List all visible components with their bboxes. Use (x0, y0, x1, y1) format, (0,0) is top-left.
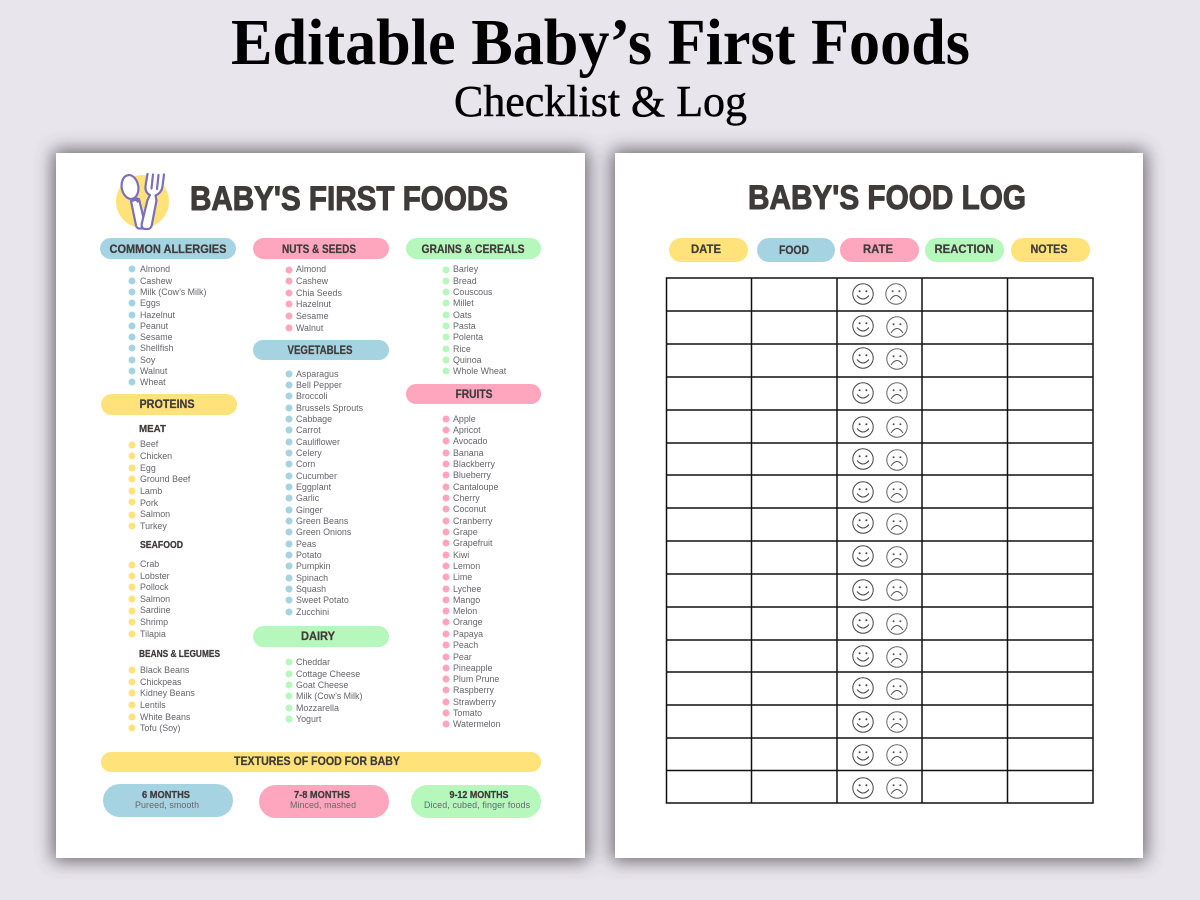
list: fruits: Kiwi (453, 550, 469, 560)
list: fruits: Pear (453, 652, 472, 662)
list: dairy: Mozzarella (296, 703, 339, 713)
pill: date: DATE (691, 242, 721, 256)
list: vegetables: Green Beans (296, 516, 349, 526)
list: common allergies: Wheat (140, 377, 166, 387)
list: grains and cereals: Rice (453, 344, 471, 354)
list: grains and cereals (446, 264, 507, 376)
banner: textures of food for baby (101, 752, 541, 772)
card: 9-12 months: 9-12 MONTHS (450, 789, 508, 801)
list: grains and cereals: Couscous (453, 287, 493, 297)
section: nuts and seeds (253, 238, 389, 333)
list: meat: Lamb (140, 486, 162, 496)
list: fruits: Blackberry (453, 459, 495, 469)
list: dairy: Cheddar (296, 657, 330, 667)
pill: fruits (406, 384, 541, 404)
list: meat: Chicken (140, 451, 172, 461)
card: 7-8 months: 7-8 MONTHS (294, 789, 350, 801)
pill: proteins: PROTEINS (140, 397, 194, 411)
list: vegetables: Celery (296, 448, 322, 458)
list: dairy: Goat Cheese (296, 680, 348, 690)
list: vegetables: Corn (296, 459, 315, 469)
list: fruits: Banana (453, 448, 484, 458)
list: dairy: Yogurt (296, 714, 322, 724)
card: 6 months: 6 MONTHS (142, 789, 190, 801)
list: meat: Turkey (140, 521, 167, 531)
pill: rate: RATE (863, 242, 893, 256)
list: fruits: Apricot (453, 425, 481, 435)
list: dairy: Milk (Cow’s Milk) (296, 691, 362, 701)
pill: notes (1011, 238, 1090, 262)
pill: common allergies: COMMON ALLERGIES (110, 242, 226, 256)
list: fruits: Lime (453, 572, 472, 582)
list: seafood: Sardine (140, 605, 171, 615)
list: grains and cereals: Pasta (453, 321, 476, 331)
list: fruits: Apple (453, 414, 476, 424)
list: fruits: Plum Prune (453, 674, 499, 684)
list: fruits: Mango (453, 595, 480, 605)
heading: baby's first foods: BABY'S FIRST FOODS (190, 180, 508, 218)
list: vegetables: Sweet Potato (296, 595, 349, 605)
card: 7-8 months (259, 785, 389, 818)
section: proteins (101, 394, 237, 733)
list: vegetables: Carrot (296, 425, 321, 435)
list: common allergies: Shellfish (140, 343, 174, 353)
list: fruits: Coconut (453, 504, 487, 514)
list: fruits: Lychee (453, 584, 481, 594)
list: nuts and seeds: Almond (296, 264, 326, 274)
list: beans and legumes: Chickpeas (140, 677, 182, 687)
list: common allergies: Sesame (140, 332, 173, 342)
list: vegetables: Cabbage (296, 414, 332, 424)
list: vegetables: Cucumber (296, 471, 337, 481)
list: fruits: Raspberry (453, 685, 495, 695)
section: dairy (253, 626, 389, 724)
list: grains and cereals: Polenta (453, 332, 483, 342)
title: Editable Baby’s First Foods (231, 6, 970, 79)
pill: fruits: FRUITS (456, 387, 492, 401)
card: 7-8 months: Minced, mashed (290, 800, 356, 810)
list: vegetables: Zucchini (296, 607, 329, 617)
pill: grains and cereals: GRAINS & CEREALS (422, 242, 524, 256)
heading: baby's food log: BABY'S FOOD LOG (748, 179, 1026, 217)
list: meat: Beef (140, 439, 159, 449)
list: fruits: Orange (453, 617, 483, 627)
list: vegetables: Green Onions (296, 527, 352, 537)
list: vegetables: Bell Pepper (296, 380, 342, 390)
pill: date (669, 238, 748, 262)
pill: food: FOOD (779, 243, 809, 257)
list: fruits: Grape (453, 527, 478, 537)
list: beans and legumes: White Beans (140, 712, 191, 722)
list: fruits: Lemon (453, 561, 480, 571)
table grid (666, 278, 1093, 803)
card: 9-12 months (411, 785, 541, 818)
list: fruits: Watermelon (453, 719, 501, 729)
list: seafood (132, 559, 171, 639)
list: vegetables: Asparagus (296, 369, 339, 379)
card: 6 months (103, 784, 233, 817)
list: fruits: Papaya (453, 629, 483, 639)
list: fruits: Peach (453, 640, 478, 650)
subheading: seafood: SEAFOOD (140, 540, 183, 551)
list: nuts and seeds: Cashew (296, 276, 329, 286)
section: fruits (406, 384, 541, 729)
list: nuts and seeds: Hazelnut (296, 299, 332, 309)
icon: spoon and fork (116, 174, 169, 229)
list: meat: Ground Beef (140, 474, 191, 484)
list: vegetables: Squash (296, 584, 326, 594)
pill: nuts and seeds: NUTS & SEEDS (282, 242, 356, 256)
list: vegetables: Broccoli (296, 391, 328, 401)
list: nuts and seeds: Sesame (296, 311, 329, 321)
list: common allergies: Milk (Cow’s Milk) (140, 287, 206, 297)
pill: notes: NOTES (1030, 242, 1068, 256)
list: grains and cereals: Barley (453, 264, 479, 274)
pill: rate (840, 238, 919, 262)
card: 9-12 months: Diced, cubed, finger foods (424, 800, 531, 810)
list: common allergies: Eggs (140, 298, 161, 308)
pill: reaction: REACTION (934, 242, 994, 256)
banner: textures of food for baby: TEXTURES OF FOOD FOR BABY (234, 754, 400, 768)
list: grains and cereals: Whole Wheat (453, 366, 507, 376)
pill: proteins (101, 394, 237, 415)
list: fruits (446, 414, 501, 729)
list: fruits: Cantaloupe (453, 482, 498, 492)
subheading: beans and legumes: BEANS & LEGUMES (139, 649, 220, 660)
list: grains and cereals: Bread (453, 276, 477, 286)
list: fruits: Cherry (453, 493, 480, 503)
list: grains and cereals: Quinoa (453, 355, 482, 365)
list: fruits: Cranberry (453, 516, 493, 526)
list: vegetables (289, 369, 364, 617)
list: beans and legumes: Black Beans (140, 665, 190, 675)
list: seafood: Crab (140, 559, 159, 569)
panel shadows (53, 150, 1146, 861)
list: vegetables: Brussels Sprouts (296, 403, 364, 413)
list: nuts and seeds: Chia Seeds (296, 288, 342, 298)
list: vegetables: Pumpkin (296, 561, 331, 571)
list: fruits: Melon (453, 606, 477, 616)
list: grains and cereals: Oats (453, 310, 472, 320)
list: vegetables: Garlic (296, 493, 320, 503)
list: seafood: Salmon (140, 594, 170, 604)
list: fruits: Grapefruit (453, 538, 493, 548)
list: fruits: Avocado (453, 436, 487, 446)
list: meat: Egg (140, 463, 156, 473)
list: seafood: Pollock (140, 582, 169, 592)
list: fruits: Strawberry (453, 697, 496, 707)
list: vegetables: Cauliflower (296, 437, 340, 447)
pill: common allergies (100, 238, 236, 259)
list: common allergies: Hazelnut (140, 310, 176, 320)
list: common allergies: Walnut (140, 366, 168, 376)
list: seafood: Shrimp (140, 617, 168, 627)
list: common allergies: Cashew (140, 276, 173, 286)
rating icons: smiley and frowny faces (853, 284, 907, 798)
list: common allergies: Almond (140, 264, 170, 274)
pill: dairy: DAIRY (301, 629, 335, 643)
list: seafood: Tilapia (140, 629, 166, 639)
subheading: meat: MEAT (139, 423, 167, 435)
list: meat (132, 439, 191, 531)
card: 6 months: Pureed, smooth (135, 800, 199, 810)
list: vegetables: Spinach (296, 573, 328, 583)
list: dairy (289, 657, 362, 724)
list: fruits: Blueberry (453, 470, 492, 480)
list: fruits: Pineapple (453, 663, 493, 673)
list: nuts and seeds (289, 264, 342, 333)
list: dairy: Cottage Cheese (296, 669, 360, 679)
list: meat: Pork (140, 498, 159, 508)
list: common allergies: Peanut (140, 321, 169, 331)
panel: checklist (56, 153, 585, 858)
list: grains and cereals: Millet (453, 298, 474, 308)
list: vegetables: Eggplant (296, 482, 332, 492)
list: vegetables: Peas (296, 539, 317, 549)
list: vegetables: Ginger (296, 505, 323, 515)
list: beans and legumes: Kidney Beans (140, 688, 195, 698)
list: beans and legumes: Tofu (Soy) (140, 723, 180, 733)
panel: food log (615, 153, 1143, 858)
section: common allergies (100, 238, 236, 387)
pill: food (757, 238, 835, 262)
list: seafood: Lobster (140, 571, 170, 581)
pill: vegetables (253, 340, 389, 360)
pill: vegetables: VEGETABLES (288, 343, 352, 357)
section: grains and cereals (406, 238, 541, 376)
pill: reaction (925, 238, 1004, 262)
list: beans and legumes: Lentils (140, 700, 166, 710)
list: vegetables: Potato (296, 550, 322, 560)
list: beans and legumes (132, 665, 195, 733)
list: nuts and seeds: Walnut (296, 323, 324, 333)
list: common allergies: Soy (140, 355, 156, 365)
subtitle: Checklist & Log (454, 77, 747, 126)
list: meat: Salmon (140, 509, 170, 519)
section: vegetables (253, 340, 389, 617)
list: common allergies (132, 264, 206, 387)
list: fruits: Tomato (453, 708, 482, 718)
